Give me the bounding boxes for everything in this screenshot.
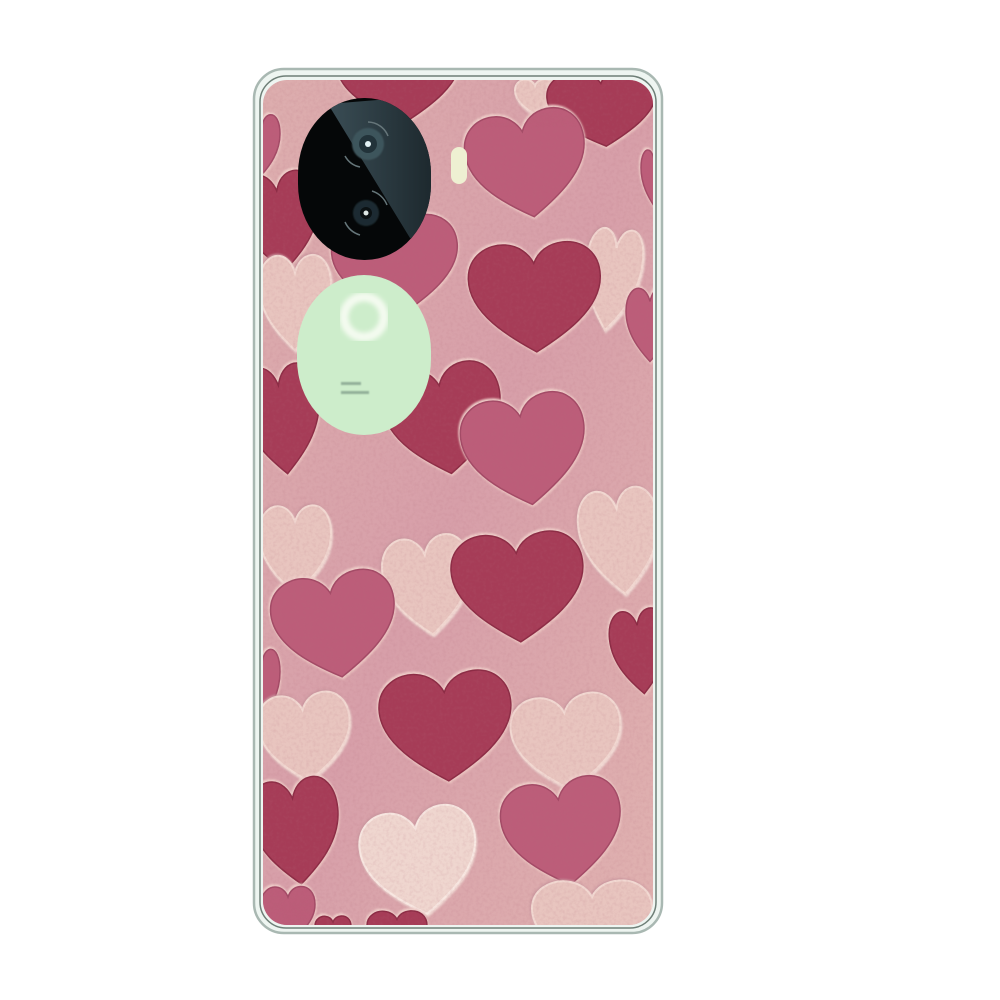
case artwork: painted hearts [263, 80, 653, 925]
flash [451, 147, 467, 184]
paint texture [263, 80, 653, 925]
phone case product illustration [252, 68, 664, 934]
camera body [298, 98, 431, 260]
lower lens [345, 191, 387, 235]
hearts pattern [263, 80, 653, 925]
upper lens [345, 122, 388, 167]
light ring [344, 297, 384, 337]
diagonal glass reflection [330, 100, 431, 238]
camera module [298, 95, 440, 260]
green logo pill [297, 275, 431, 435]
tiny illegible printed marks [341, 382, 369, 394]
case frame [254, 69, 662, 933]
artwork background [263, 80, 653, 925]
